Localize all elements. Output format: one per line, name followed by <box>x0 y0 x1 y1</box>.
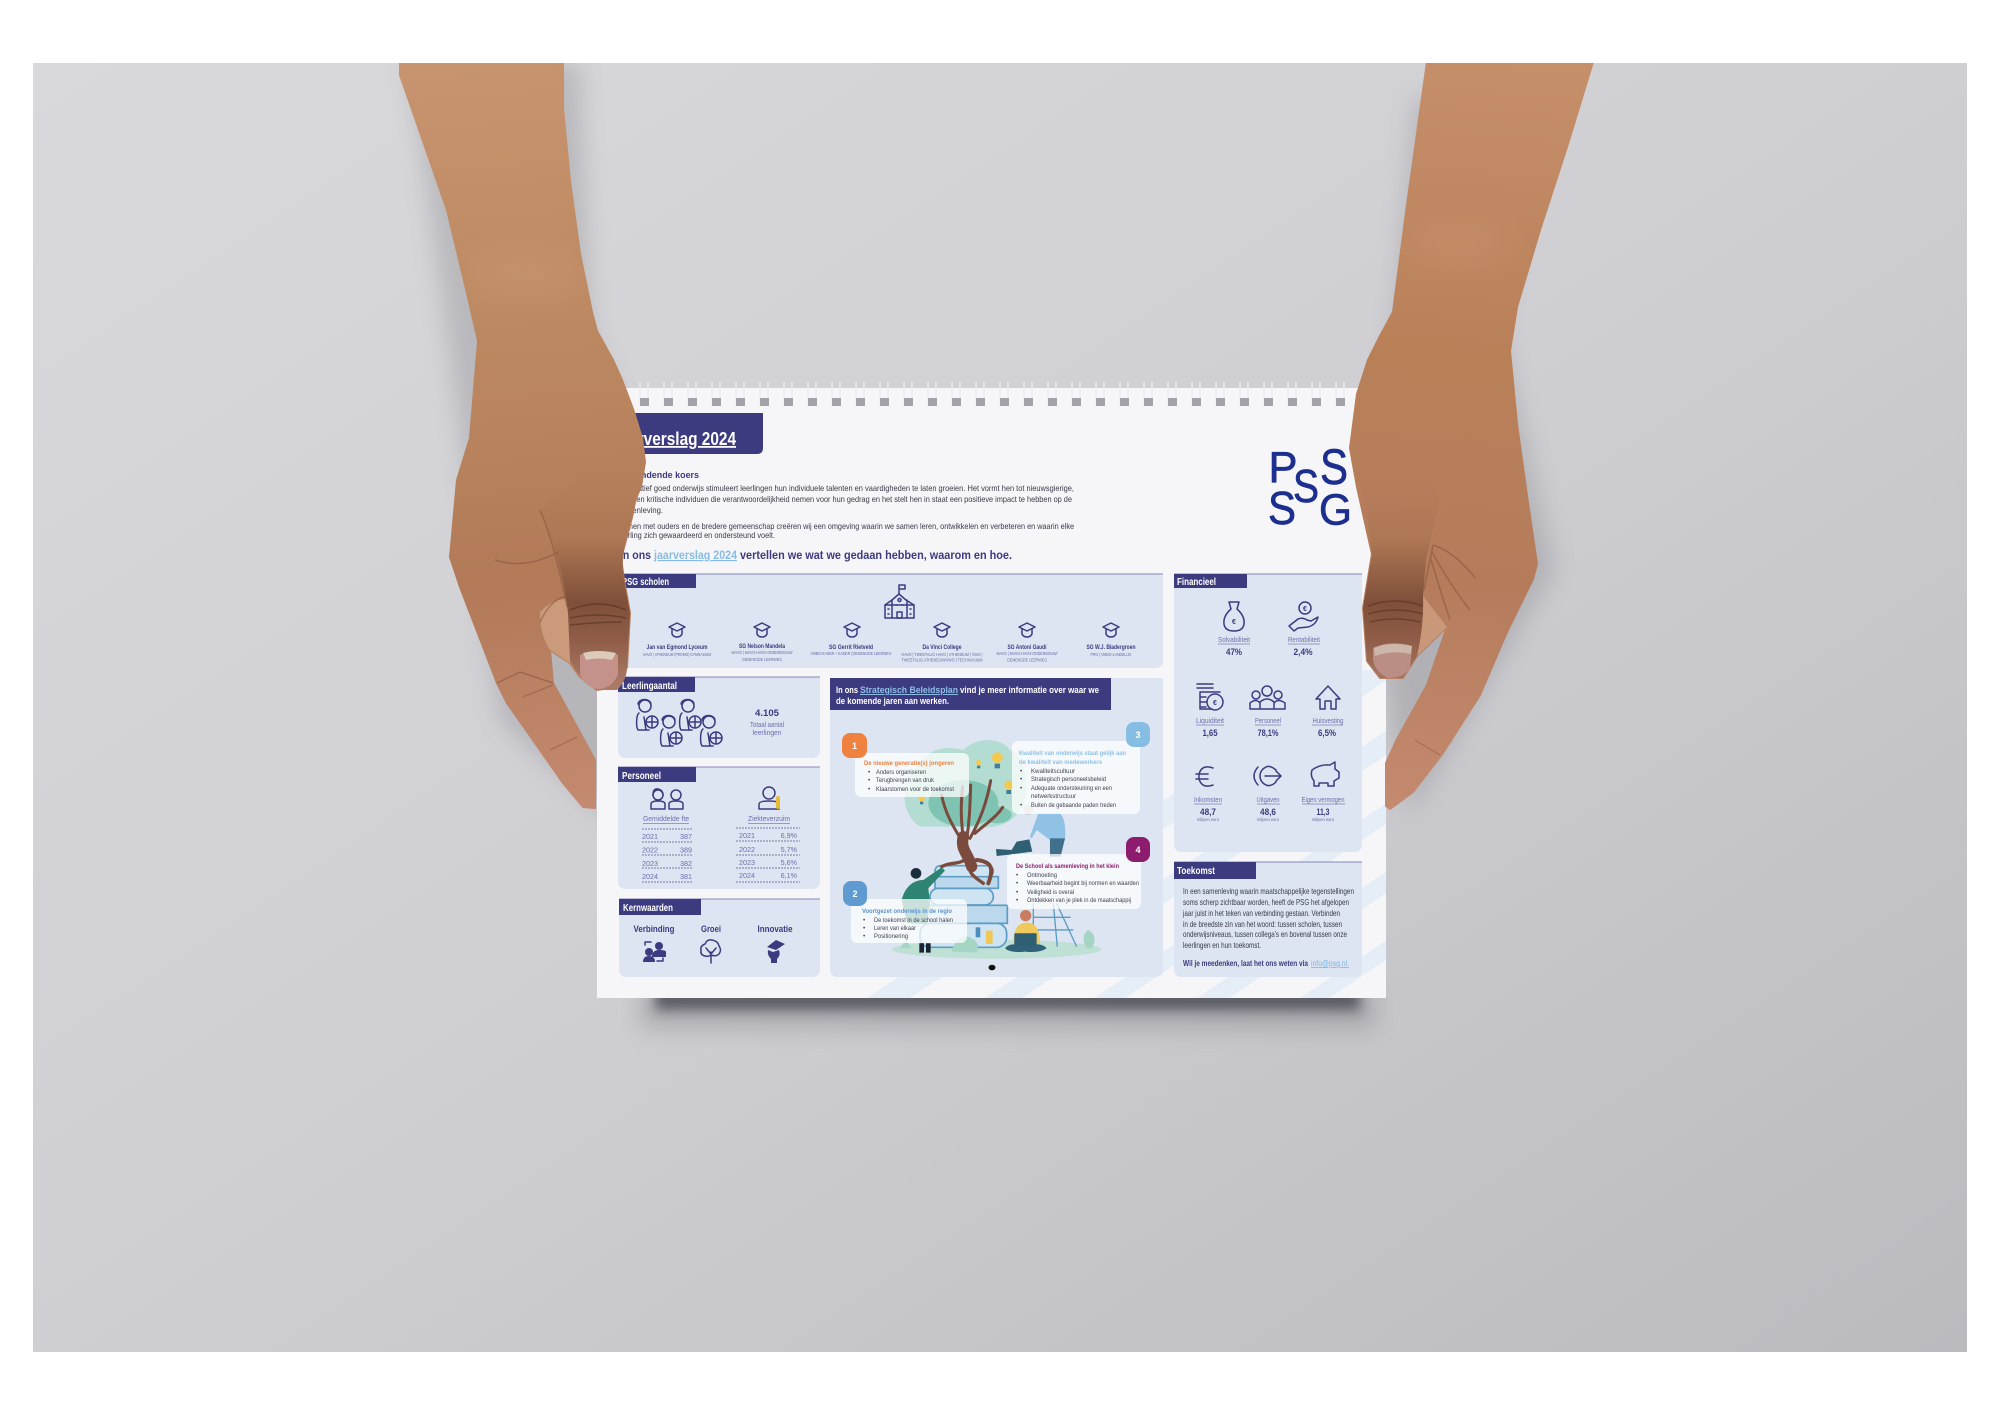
heading: Toekomst: Toekomst <box>1177 866 1216 877</box>
thumb <box>553 494 639 690</box>
future text: in de breedste zin van het woord: tussen scholen, tussen <box>1183 919 1342 929</box>
table: gemiddelde fte: 2021 <box>642 832 658 841</box>
callout 3: Kwaliteit van onderwijs: • <box>1020 768 1022 775</box>
panel: Leerlingaantal <box>618 677 820 758</box>
metric: Liquiditeit: 1,65 <box>1202 727 1218 738</box>
school: SG Nelson Mandela: SG Nelson Mandela <box>739 644 786 650</box>
finger joint line <box>523 685 577 750</box>
thumbnail tip <box>1374 644 1412 656</box>
table: ziekteverzuim: 5,7% <box>781 845 798 854</box>
value: Verbinding: Verbinding <box>634 923 675 934</box>
school: SG Gerrit Rietveld: SG Gerrit Rietveld <box>829 645 873 651</box>
callout 4: De School als samenleving: 4 <box>1135 845 1141 855</box>
logo PSSG: P <box>1268 443 1298 492</box>
heading: Financieel: Financieel <box>1177 577 1216 588</box>
callout 3: Kwaliteit van onderwijs: Kwaliteitscultuur <box>1031 768 1076 775</box>
future text: onderwijsniveaus, tussen collega's en bovenal tussen onze <box>1183 929 1347 939</box>
callout 3: Kwaliteit van onderwijs: • <box>1020 776 1022 783</box>
callout 4: De School als samenleving: • <box>1016 872 1018 879</box>
callout 2: Voortgezet onderwijs in de regio: Voortgezet onderwijs in de regio <box>862 908 952 915</box>
callout 4: De School als samenleving: Ontmoeting <box>1027 872 1057 879</box>
icon: students <box>637 700 722 746</box>
metric: Eigen vermogen <box>1302 762 1345 822</box>
metric: Huisvesting <box>1312 686 1344 738</box>
callout 3: Kwaliteit van onderwijs: Kwaliteit van onderwijs staat gelijk aan <box>1019 750 1126 757</box>
metric: Liquiditeit: Liquiditeit <box>1196 716 1224 725</box>
total pupils <box>750 707 784 737</box>
callout 4: De School als samenleving <box>1007 837 1150 909</box>
callout 2: Voortgezet onderwijs in de regio <box>843 881 967 943</box>
pagination dot <box>988 965 996 970</box>
callout 1: De nieuwe generatie(s) jongeren: Anders organiseren <box>876 769 926 776</box>
heading: Leerlingaantal <box>618 677 695 692</box>
callout 1: De nieuwe generatie(s) jongeren: • <box>868 786 870 793</box>
icon: two staff members <box>651 789 683 809</box>
palm creases <box>1424 545 1475 620</box>
table: gemiddelde fte: Gemiddelde fte <box>643 814 689 823</box>
callout 2: Voortgezet onderwijs in de regio: Leren van elkaar <box>874 925 917 932</box>
metric: Inkomsten: miljoen euro <box>1197 817 1220 822</box>
school: SG W.J. Bladergroen: PRO | VMBO-LANDELIJK <box>1090 652 1132 657</box>
table: ziekteverzuim: 2021 <box>739 831 755 840</box>
logo PSSG <box>1268 439 1352 534</box>
table: ziekteverzuim: 2022 <box>739 845 755 854</box>
school: SG W.J. Bladergroen: SG W.J. Bladergroen <box>1086 645 1136 651</box>
metric: Uitgaven: miljoen euro <box>1257 817 1280 822</box>
metric: Huisvesting: Huisvesting <box>1312 716 1344 725</box>
metric: Rentabiliteit: € <box>1303 606 1307 613</box>
heading: PSG scholen: PSG scholen <box>622 577 669 588</box>
icon: sick staff member <box>759 787 780 809</box>
metric: Rentabiliteit <box>1288 602 1320 657</box>
panel: Personeel <box>618 767 820 889</box>
intro text <box>618 469 1074 540</box>
tucked finger <box>540 599 570 663</box>
school: SG Nelson Mandela: MAVO | MAVO-HAVO-ONDERBOUW/ <box>732 650 793 655</box>
thumbnail tip <box>583 651 616 660</box>
school: SG W.J. Bladergroen <box>1086 623 1136 657</box>
page shadow <box>640 985 1375 1028</box>
callout 4: De School als samenleving: • <box>1016 897 1018 904</box>
table: ziekteverzuim <box>736 814 800 882</box>
school: SG Nelson Mandela <box>732 623 793 662</box>
school: SG Gerrit Rietveld: VMBO-KADER + KADER (GEMENGDE LEERWEG <box>810 651 892 656</box>
value: Verbinding <box>634 923 675 962</box>
future text: In een samenleving waarin maatschappelijke tegenstellingen <box>1183 886 1354 896</box>
heading: strategic plan: In ons <box>836 685 858 696</box>
heading: PSG scholen <box>600 574 696 588</box>
future text: soms scherp zichtbaar worden, heeft de PSG het afgelopen <box>1183 897 1349 907</box>
table: gemiddelde fte: 381 <box>680 872 692 881</box>
metric: Inkomsten: Inkomsten <box>1194 795 1222 804</box>
total pupils: leerlingen <box>752 728 782 737</box>
callout 1: De nieuwe generatie(s) jongeren: De nieuwe generatie(s) jongeren <box>864 760 954 767</box>
jaarverslag line: jaarverslag 2024 <box>653 549 738 562</box>
metric: Inkomsten <box>1194 767 1222 822</box>
school: SG Gerrit Rietveld <box>810 623 892 656</box>
calendar page <box>597 382 1386 998</box>
heading: Kernwaarden: Kernwaarden <box>623 903 673 914</box>
table: gemiddelde fte <box>642 814 692 882</box>
table: ziekteverzuim: 2024 <box>739 871 755 880</box>
panel: PSG scholen <box>600 574 1163 668</box>
heading: Kernwaarden <box>619 899 701 915</box>
callout 2: Voortgezet onderwijs in de regio: • <box>863 925 865 932</box>
heading: strategic plan: vind je meer informatie over waar we <box>960 685 1099 696</box>
left hand <box>400 62 645 808</box>
school: Jan van Egmond Lyceum <box>643 623 711 657</box>
callout 4: De School als samenleving: Veiligheid is overal <box>1027 889 1074 896</box>
heading: Leerlingaantal: Leerlingaantal <box>622 681 677 692</box>
heading: strategic plan <box>830 678 1111 710</box>
title tab: Jaarverslag 2024 <box>612 429 736 449</box>
callout 4: De School als samenleving: Weerbaarheid begint bij normen en waarden <box>1027 880 1139 887</box>
callout 3: Kwaliteit van onderwijs <box>1012 722 1150 814</box>
table: gemiddelde fte: 2023 <box>642 859 658 868</box>
callout 3: Kwaliteit van onderwijs: netwerkstructuur <box>1031 793 1077 800</box>
icon: school building <box>885 585 914 618</box>
metric: Solvabiliteit: 47% <box>1226 646 1243 657</box>
heading: Toekomst <box>1174 862 1256 879</box>
heading: strategic plan: Strategisch Beleidsplan <box>860 685 958 696</box>
table: ziekteverzuim: 6,9% <box>781 831 798 840</box>
metric: Rentabiliteit: 2,4% <box>1294 646 1313 657</box>
value: Innovatie: Innovatie <box>758 923 792 934</box>
callout 2: Voortgezet onderwijs in de regio: • <box>863 917 865 924</box>
metric: Personeel: 78,1% <box>1258 727 1279 738</box>
callout 1: De nieuwe generatie(s) jongeren: • <box>868 769 870 776</box>
logo PSSG: S <box>1268 482 1296 534</box>
hand shadows <box>410 62 1555 820</box>
thumbnail <box>580 652 618 689</box>
school: SG Nelson Mandela: GEMENGDE LEERWEG <box>742 657 782 662</box>
heading: Personeel: Personeel <box>622 771 661 782</box>
callout 3: Kwaliteit van onderwijs: Buiten de gebaande paden treden <box>1031 802 1116 809</box>
spiral binding <box>640 382 1345 406</box>
intro text: Kwalitatief goed onderwijs stimuleert leerlingen hun individuele talenten en vaardigheden te laten groeien. Het vormt hen tot nieuwsgierige, <box>618 483 1074 493</box>
callout 2: Voortgezet onderwijs in de regio: 2 <box>852 889 858 899</box>
callout 3: Kwaliteit van onderwijs: • <box>1020 785 1022 792</box>
callout 4: De School als samenleving: Ontdekken van je plek in de maatschappij <box>1027 897 1131 904</box>
logo PSSG: S <box>1293 460 1319 512</box>
callout 2: Voortgezet onderwijs in de regio: • <box>863 933 865 940</box>
intro text: Samen met ouders en de bredere gemeenschap creëren wij een omgeving waarin we samen leren, ontwikkelen en verbeteren en waarin elke <box>618 521 1074 531</box>
wrist highlight <box>465 255 585 295</box>
jaarverslag line: In ons <box>620 549 651 562</box>
metric: Liquiditeit <box>1196 684 1224 738</box>
metric: Uitgaven <box>1254 766 1281 822</box>
metric: Personeel <box>1250 686 1285 738</box>
callout 3: Kwaliteit van onderwijs: Adequate ondersteuning en een <box>1031 785 1112 792</box>
metric: Liquiditeit: € <box>1213 700 1217 707</box>
total pupils: 4.105 <box>755 707 779 718</box>
table: gemiddelde fte: 389 <box>680 846 692 854</box>
value: Groei: Groei <box>701 923 721 934</box>
background stripes <box>868 670 1386 998</box>
metric: Inkomsten: 48,7 <box>1200 806 1216 817</box>
heading: Personeel <box>618 767 696 782</box>
intro text: Verbindende koers <box>619 469 699 480</box>
callout 1: De nieuwe generatie(s) jongeren: Klaarstomen voor de toekomst <box>876 786 954 793</box>
heading: Financieel <box>1174 574 1247 588</box>
metric: Eigen vermogen: 11,3 <box>1316 806 1330 817</box>
metric: Rentabiliteit: Rentabiliteit <box>1288 635 1320 644</box>
table: gemiddelde fte: 2024 <box>642 872 658 881</box>
school: SG Antoni Gaudí: SG Antoni Gaudí <box>1008 645 1047 651</box>
table: gemiddelde fte: 387 <box>680 832 692 841</box>
intro text: leerling zich gewaardeerd en ondersteund voelt. <box>618 530 775 540</box>
metric: Eigen vermogen: Eigen vermogen <box>1302 795 1344 804</box>
metric: Personeel: Personeel <box>1255 716 1281 725</box>
callout 1: De nieuwe generatie(s) jongeren: Terugbrengen van druk <box>876 777 935 784</box>
future text: info@psg.nl. <box>1311 959 1349 968</box>
right hand <box>1350 62 1593 809</box>
callout 2: Voortgezet onderwijs in de regio: Positionering <box>874 933 908 940</box>
metric: Uitgaven: 48,6 <box>1260 806 1276 817</box>
table: ziekteverzuim: 2023 <box>739 858 755 867</box>
metric: Huisvesting: 6,5% <box>1318 727 1337 738</box>
wrist highlight <box>1400 225 1510 265</box>
tucked finger <box>1417 596 1447 656</box>
callout 1: De nieuwe generatie(s) jongeren: 1 <box>852 741 857 751</box>
metric: Solvabiliteit <box>1218 602 1250 657</box>
panel: Kernwaarden <box>619 899 820 977</box>
value: Innovatie <box>758 923 792 963</box>
page sheet <box>597 388 1386 998</box>
value: Groei <box>701 923 721 963</box>
illustration: tree on books with people <box>892 740 1102 959</box>
school: Da Vinci College: Da Vinci College <box>922 645 962 651</box>
school: SG Antoni Gaudí <box>996 623 1058 662</box>
total pupils: Totaal aantal <box>750 720 784 729</box>
future text <box>1182 886 1354 968</box>
thumb knuckle crease <box>1368 601 1423 622</box>
school: Da Vinci College: HAVO | TWEETALIG HAVO | ATHENEUM | VWO | <box>902 652 982 657</box>
callout 2: Voortgezet onderwijs in de regio: De toekomst in de school halen <box>874 917 953 924</box>
callout 3: Kwaliteit van onderwijs: de kwaliteit van medewerkers <box>1019 759 1102 766</box>
table: gemiddelde fte: 382 <box>680 859 692 868</box>
jaarverslag line: vertellen we wat we gedaan hebben, waarom en hoe. <box>740 549 1012 562</box>
thumb <box>1363 538 1431 678</box>
metric: Solvabiliteit: Solvabiliteit <box>1218 635 1250 644</box>
callout 3: Kwaliteit van onderwijs: Strategisch personeelsbeleid <box>1031 776 1106 783</box>
jaarverslag line <box>620 549 1012 562</box>
logo PSSG: G <box>1319 486 1352 534</box>
future text: jaar juist in het teken van verbinding gestaan. Verbinden <box>1182 908 1340 918</box>
heading: strategic plan: de komende jaren aan werken. <box>836 696 949 707</box>
logo PSSG: S <box>1320 439 1348 495</box>
panel: Financieel <box>1174 574 1362 852</box>
finger joint line <box>1415 740 1440 755</box>
metric: Solvabiliteit: € <box>1232 619 1236 626</box>
table: ziekteverzuim: 6,1% <box>781 871 798 880</box>
school: Da Vinci College: TWEETALIG ATHENEUM/VWO | TECHNASIUM <box>902 658 983 662</box>
callout 1: De nieuwe generatie(s) jongeren: • <box>868 777 870 784</box>
school: Da Vinci College <box>902 623 983 662</box>
future text: Wil je meedenken, laat het ons weten via <box>1183 959 1308 968</box>
metric: Uitgaven: Uitgaven <box>1256 795 1280 804</box>
panel: Strategisch Beleidsplan <box>830 678 1163 977</box>
table: gemiddelde fte: 2022 <box>642 846 658 854</box>
callout 4: De School als samenleving: • <box>1016 889 1018 896</box>
thumb knuckle crease <box>570 604 626 625</box>
school: SG Antoni Gaudí: GEMENGDE LEERWEG <box>1007 658 1047 662</box>
intro text: open en kritische individuen die verantwoordelijkheid nemen voor hun gedrag en het stelt hen in staat een positieve impact te hebben op de <box>618 494 1072 504</box>
table: ziekteverzuim: 5,6% <box>781 858 798 867</box>
callout 1: De nieuwe generatie(s) jongeren <box>842 733 969 797</box>
school: SG Antoni Gaudí: MAVO | MAVO-HAVO-ONDERBOUW/ <box>996 651 1058 656</box>
school: Jan van Egmond Lyceum: HAVO | ATHENEUM (PROMO) GYMNASIUM <box>643 652 711 657</box>
thumbnail <box>1373 643 1412 678</box>
callout 4: De School als samenleving: De School als samenleving in het klein <box>1016 863 1119 870</box>
panel: Toekomst <box>1174 862 1362 977</box>
table: ziekteverzuim: Ziekteverzuim <box>748 814 790 823</box>
title tab <box>600 413 763 454</box>
callout 3: Kwaliteit van onderwijs: • <box>1020 802 1022 809</box>
intro text: samenleving. <box>618 505 663 515</box>
school: Jan van Egmond Lyceum: Jan van Egmond Lyceum <box>646 645 708 651</box>
callout 3: Kwaliteit van onderwijs: 3 <box>1135 730 1141 740</box>
palm creases <box>495 510 567 683</box>
metric: Eigen vermogen: miljoen euro <box>1312 817 1335 822</box>
callout 4: De School als samenleving: • <box>1016 880 1018 887</box>
future text: leerlingen en hun toekomst. <box>1183 940 1261 950</box>
